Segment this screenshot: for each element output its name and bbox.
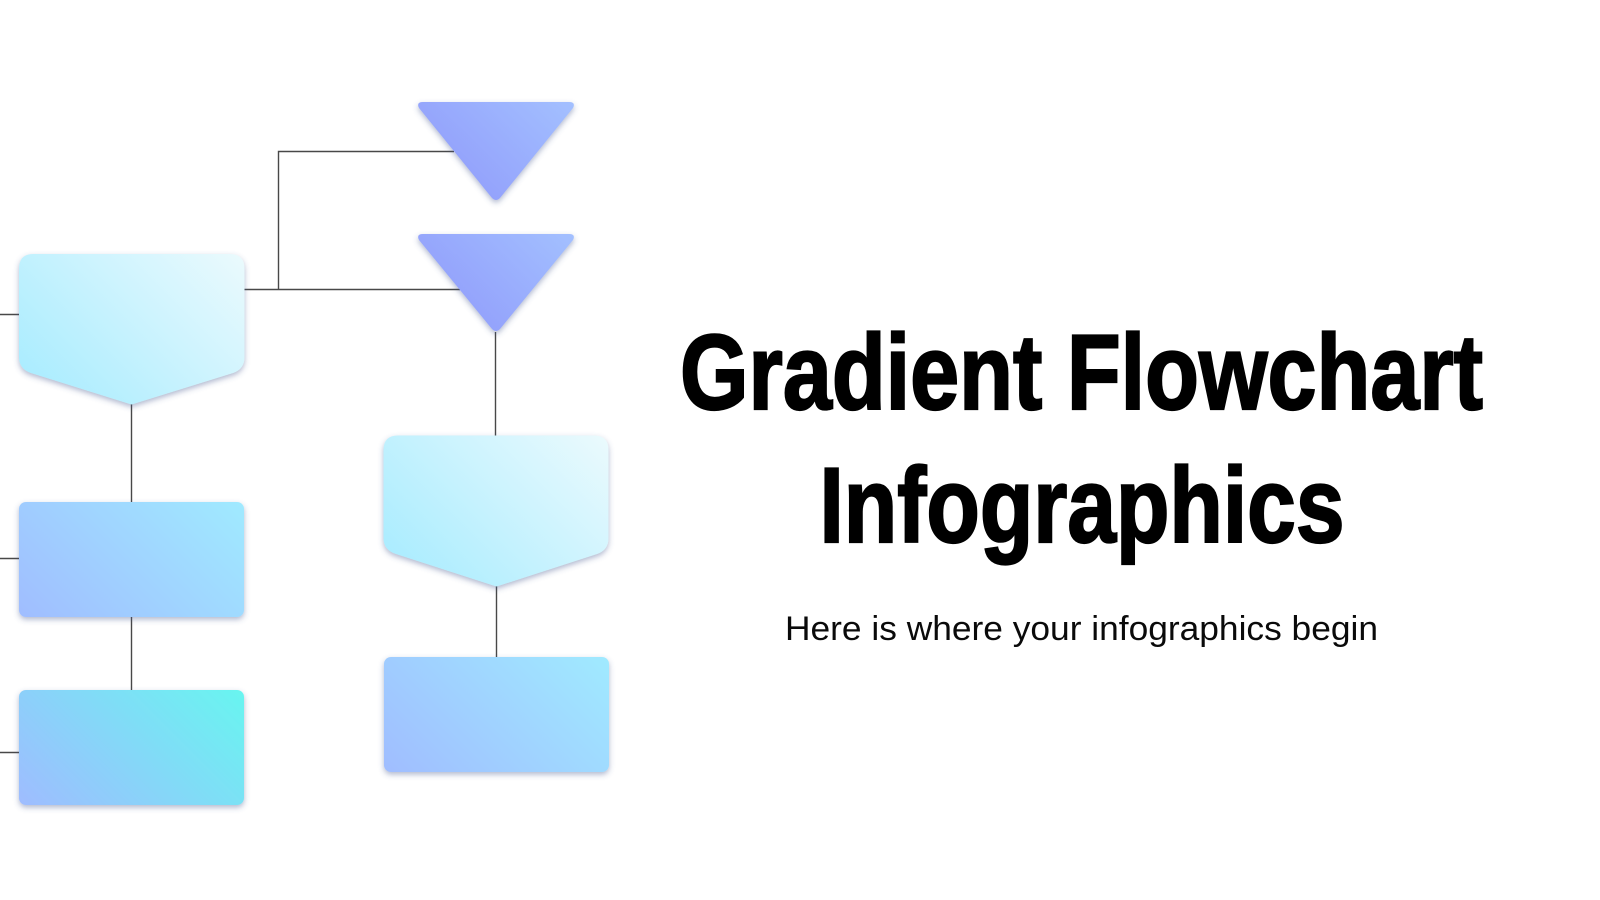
subtitle: Here is where your infographics begin xyxy=(785,610,1378,648)
rectangle node right bottom xyxy=(384,657,609,772)
pentagon node right xyxy=(384,436,608,586)
triangle node top xyxy=(418,102,574,200)
pentagon node left xyxy=(19,254,244,404)
triangle node second xyxy=(418,234,574,331)
rectangle node left bottom xyxy=(19,690,244,805)
connector lines xyxy=(0,152,496,752)
title xyxy=(680,312,1483,565)
rectangle node left middle xyxy=(19,502,244,617)
title: Infographics xyxy=(820,445,1344,565)
